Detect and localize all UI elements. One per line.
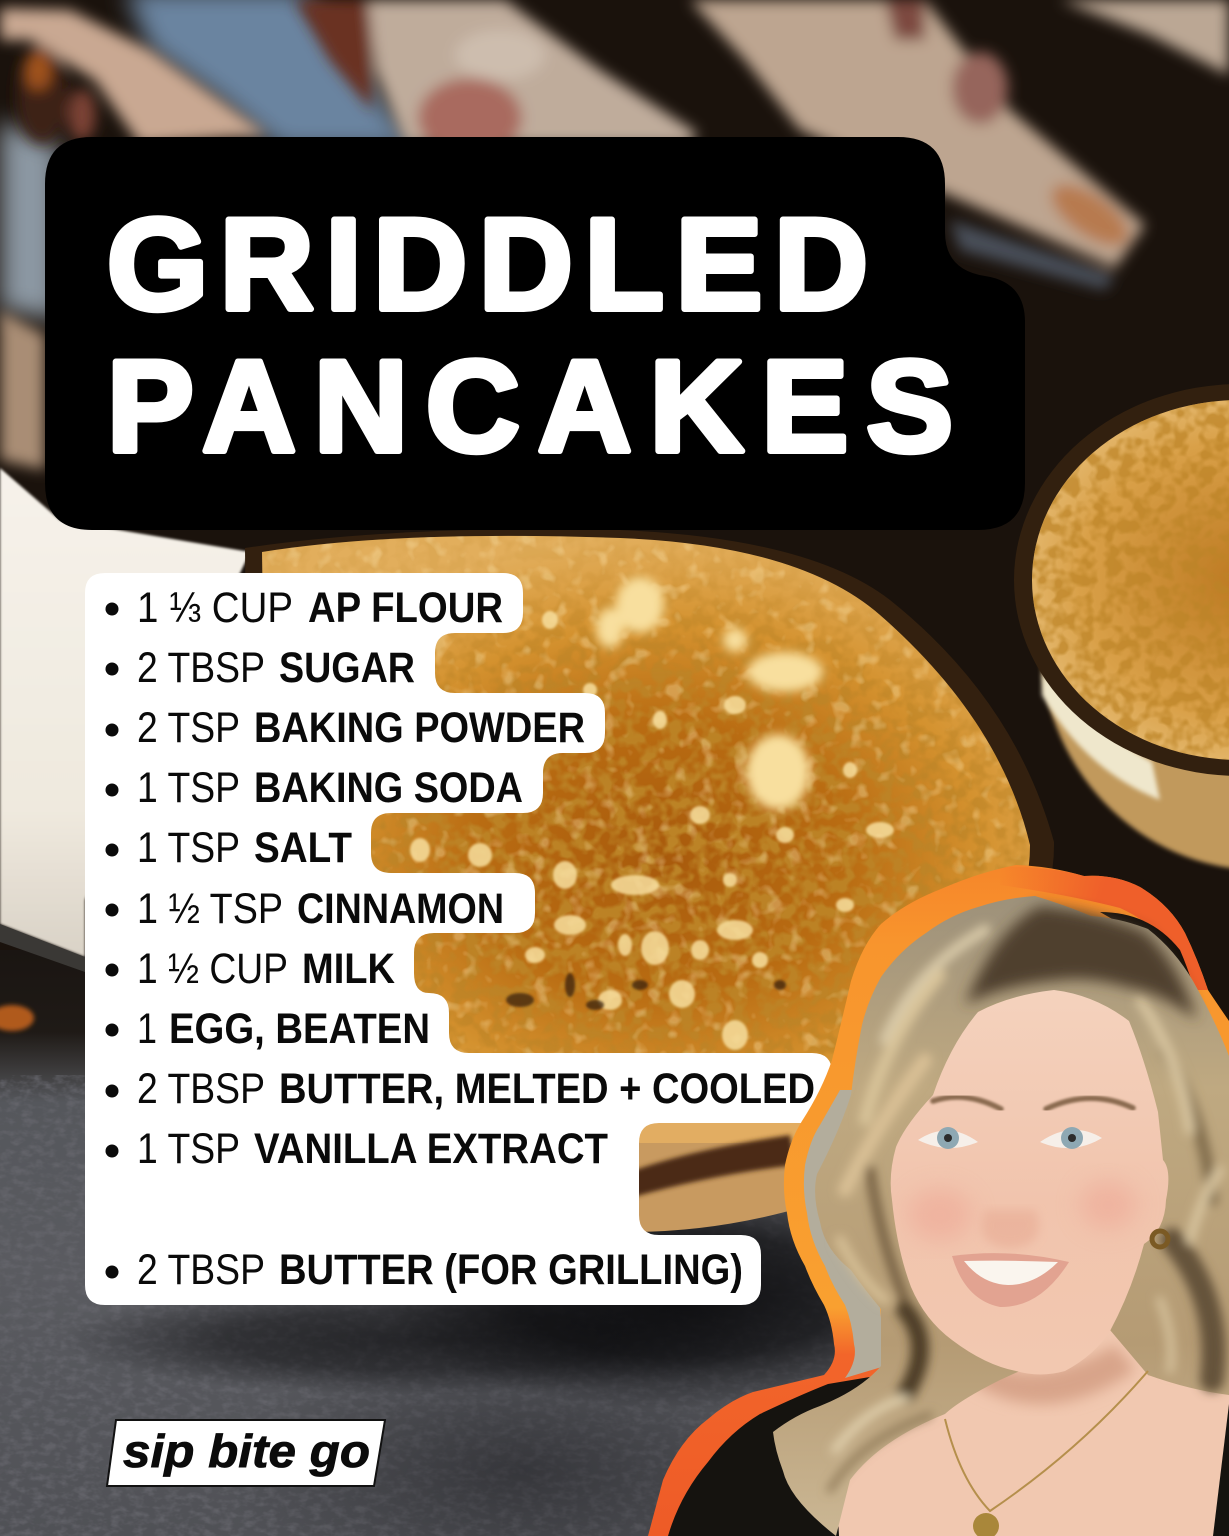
bacon strips xyxy=(0,0,1229,470)
necklace xyxy=(945,1371,1148,1536)
ingredient: vanilla: VANILLA EXTRACT xyxy=(254,1125,608,1173)
eyebrows xyxy=(933,1097,1133,1109)
ingredient: cinnamon xyxy=(106,885,504,933)
ingredient: baking powder: 2 TSP xyxy=(137,704,240,752)
left eye xyxy=(918,1127,978,1149)
neck shadow xyxy=(965,1345,1135,1404)
ingredient: flour: 1 ⅓ CUP xyxy=(137,584,293,632)
griddle top left reflection xyxy=(0,0,420,320)
ingredient: baking powder xyxy=(106,704,585,752)
hair strands xyxy=(830,930,1220,1490)
ingredient: baking powder: BAKING POWDER xyxy=(254,704,585,752)
smile xyxy=(952,1253,1069,1307)
griddle sliver between hair and outline xyxy=(1100,912,1190,977)
ingredient: milk: MILK xyxy=(302,945,395,993)
ingredient: egg: 1 xyxy=(137,1005,157,1053)
title panel xyxy=(45,137,1025,530)
ingredient: vanilla xyxy=(106,1125,608,1173)
pancake bubbles xyxy=(410,577,894,1050)
ingredient: flour xyxy=(106,584,503,632)
griddle surface lower area xyxy=(0,993,835,1536)
ingredient: baking soda: 1 TSP xyxy=(137,764,240,812)
ingredient: butter for grilling: BUTTER (FOR GRILLING) xyxy=(279,1246,743,1294)
ingredient: sugar: 2 TBSP xyxy=(137,644,265,692)
pancake fragment below list xyxy=(630,1123,810,1232)
ingredient: salt: SALT xyxy=(254,824,352,872)
logo: sip bite go xyxy=(107,1420,385,1486)
ingredient: butter melted xyxy=(106,1065,815,1113)
title line: PANCAKES: PANCAKES xyxy=(107,333,953,479)
ingredient: sugar xyxy=(106,644,415,692)
ingredient: butter for grilling: 2 TBSP xyxy=(137,1246,265,1294)
ingredient: butter melted: BUTTER, MELTED + COOLED xyxy=(279,1065,815,1113)
cheek blush xyxy=(908,1181,1136,1241)
dark hair roots xyxy=(965,906,1197,1020)
black top xyxy=(668,1376,870,1536)
ingredient: butter for grilling xyxy=(106,1246,743,1294)
right pancake xyxy=(1014,384,1229,870)
face xyxy=(891,990,1168,1374)
white plate at left xyxy=(0,468,250,957)
title line: GRIDDLED: GRIDDLED xyxy=(107,191,868,337)
ingredient: cinnamon: CINNAMON xyxy=(297,885,504,933)
neck and chest xyxy=(836,1315,1229,1536)
ingredient: salt xyxy=(106,824,352,872)
ingredient: egg: EGG, BEATEN xyxy=(169,1005,430,1053)
ingredient: flour: AP FLOUR xyxy=(308,584,503,632)
ingredient: sugar: SUGAR xyxy=(279,644,415,692)
right eye xyxy=(1040,1127,1102,1149)
panel: ingredient list xyxy=(85,573,832,1305)
main pancake xyxy=(245,530,1054,1064)
ingredient: salt: 1 TSP xyxy=(137,824,240,872)
ingredient: butter melted: 2 TBSP xyxy=(137,1065,265,1113)
portrait of woman with orange outline xyxy=(648,865,1229,1536)
earring xyxy=(1152,1231,1168,1247)
ingredient: milk xyxy=(106,945,395,993)
char marks xyxy=(506,973,786,1010)
logo: sip bite go: sip bite go xyxy=(123,1425,370,1477)
black top right edge xyxy=(1213,1404,1229,1536)
ingredient: vanilla: 1 TSP xyxy=(137,1125,240,1173)
ingredient: cinnamon: 1 ½ TSP xyxy=(137,885,283,933)
beige backdrop xyxy=(804,1090,885,1378)
nose xyxy=(982,1210,1039,1248)
hair xyxy=(773,896,1229,1536)
ingredient: baking soda xyxy=(106,764,523,812)
orange cut-out outline xyxy=(648,865,1229,1536)
ingredient: milk: 1 ½ CUP xyxy=(137,945,288,993)
ingredient: baking soda: BAKING SODA xyxy=(254,764,523,812)
